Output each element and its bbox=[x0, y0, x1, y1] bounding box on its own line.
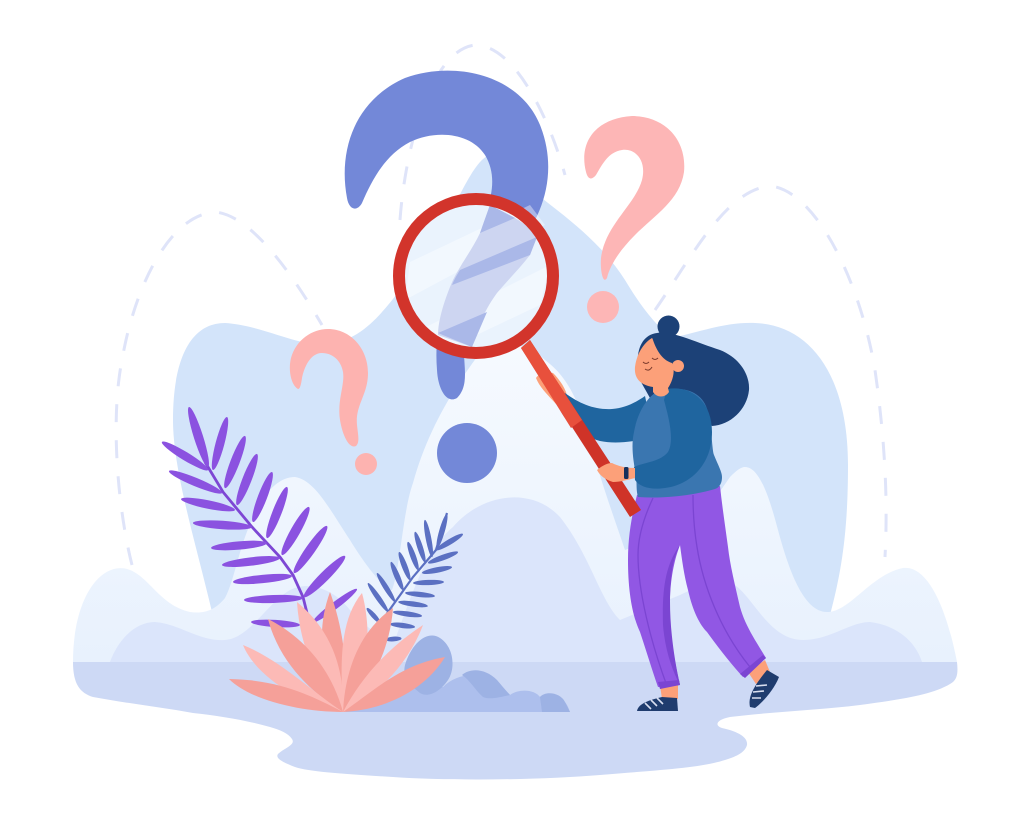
purple fern bbox=[160, 406, 359, 629]
dashed arc top bbox=[400, 45, 565, 220]
woman bbox=[521, 316, 779, 711]
mist layer bbox=[73, 345, 957, 662]
background mountains bbox=[73, 155, 957, 662]
facial features bbox=[643, 358, 658, 370]
ground bbox=[73, 662, 957, 779]
blue fern bbox=[365, 513, 464, 642]
trousers bbox=[628, 486, 766, 689]
hair back and bun bbox=[638, 316, 749, 426]
dashed arc right bbox=[655, 186, 886, 557]
ground rocks bbox=[345, 636, 570, 712]
upper hand bbox=[536, 373, 567, 404]
ankles bbox=[660, 660, 770, 699]
large question mark bbox=[345, 71, 548, 483]
sleeve over torso bbox=[634, 388, 712, 489]
lavender hills bbox=[110, 497, 922, 662]
pink question mark left bbox=[290, 329, 377, 475]
lower hand and wristband bbox=[597, 463, 635, 482]
arm reaching forward bbox=[558, 393, 650, 442]
magnifying glass lens bbox=[399, 199, 553, 353]
pink plant bbox=[229, 592, 445, 712]
lower dot bbox=[437, 423, 497, 483]
face and neck bbox=[635, 338, 674, 396]
magnifier handle bbox=[521, 340, 641, 517]
shoes bbox=[637, 670, 779, 711]
dashed arc left bbox=[116, 212, 322, 565]
hair front bbox=[652, 331, 692, 370]
sweater bbox=[633, 389, 722, 498]
ear bbox=[672, 360, 684, 372]
pink question mark right bbox=[584, 116, 684, 323]
